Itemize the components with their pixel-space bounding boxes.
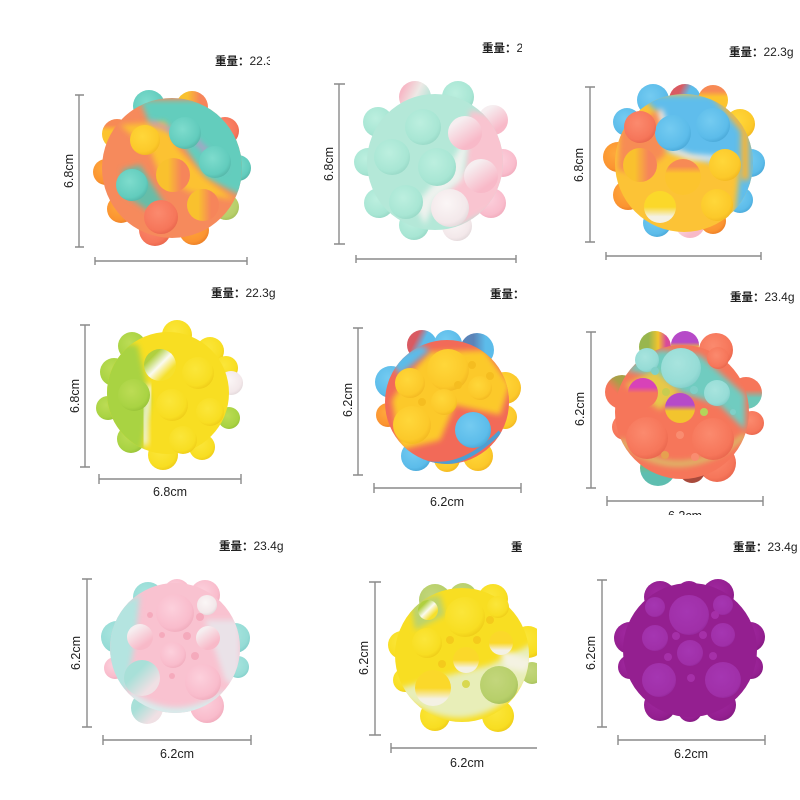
height dimension 4: 6.8cm bbox=[68, 379, 82, 413]
toy ball 4 bbox=[96, 320, 243, 470]
width dimension 6: 6.2cm bbox=[668, 509, 702, 523]
width dimension 7: 6.2cm bbox=[160, 747, 194, 761]
width dimension 3 bbox=[606, 252, 761, 260]
height dimension 5 bbox=[341, 328, 363, 475]
width dimension 9 bbox=[618, 735, 765, 761]
panel: product 4 yellow and green ball bbox=[68, 286, 276, 499]
weight label 1: 重量：22.3g bbox=[215, 54, 280, 68]
weight label 3: 重量：22.3g bbox=[729, 45, 794, 59]
toy ball 1 bbox=[93, 90, 251, 246]
panel: product 8 yellow and green ball bbox=[359, 541, 537, 767]
width dimension 7 bbox=[103, 735, 251, 761]
weight label 9: 重量：23.4g bbox=[733, 540, 798, 554]
width dimension 8 bbox=[391, 743, 537, 770]
width dimension 4 bbox=[99, 474, 241, 499]
width dimension 5: 6.2cm bbox=[430, 495, 464, 509]
weight label 8: 重量：23.4g bbox=[511, 540, 576, 554]
width dimension 6 bbox=[606, 496, 764, 515]
panel: product 3 blue and orange ball bbox=[572, 45, 794, 260]
panel: product 1 rainbow ball bbox=[62, 54, 280, 265]
height dimension 7: 6.2cm bbox=[69, 636, 83, 670]
toy ball 6 bbox=[605, 331, 764, 486]
height dimension 9: 6.2cm bbox=[584, 636, 598, 670]
toy ball 2 bbox=[354, 81, 517, 241]
height dimension 5: 6.2cm bbox=[341, 383, 355, 417]
width dimension 4: 6.8cm bbox=[153, 485, 187, 499]
width dimension 9: 6.2cm bbox=[674, 747, 708, 761]
height dimension 3: 6.8cm bbox=[572, 148, 586, 182]
weight label 7: 重量：23.4g bbox=[219, 539, 284, 553]
height dimension 6: 6.2cm bbox=[573, 392, 587, 426]
toy ball 5 bbox=[375, 330, 521, 472]
panel: product 6 coral and teal ball bbox=[573, 290, 795, 523]
weight label 5: 重量：23.4g bbox=[490, 287, 555, 301]
weight label 2: 重量：22.3g bbox=[482, 41, 547, 55]
width dimension 2 bbox=[356, 255, 516, 263]
toy ball 3 bbox=[603, 84, 765, 240]
height dimension 8: 6.2cm bbox=[357, 641, 371, 675]
height dimension 7 bbox=[69, 579, 92, 727]
toy ball 7 bbox=[101, 579, 250, 724]
height dimension 3 bbox=[572, 87, 595, 242]
width dimension 5 bbox=[374, 483, 521, 509]
height dimension 9 bbox=[584, 580, 607, 727]
height dimension 8 bbox=[357, 582, 381, 735]
height dimension 2: 6.8cm bbox=[322, 147, 336, 181]
toy ball 8 bbox=[388, 583, 544, 732]
panel: product 7 pink and aqua ball bbox=[69, 539, 284, 761]
width dimension 1 bbox=[95, 257, 247, 265]
weight label 6: 重量：23.4g bbox=[730, 290, 795, 304]
height dimension 1 bbox=[62, 95, 84, 247]
height dimension 1: 6.8cm bbox=[62, 154, 76, 188]
height dimension 4 bbox=[68, 325, 90, 467]
width dimension 8: 6.2cm bbox=[450, 756, 484, 770]
panel: product 2 mint and pink ball bbox=[324, 42, 522, 263]
panel: product 5 yellow, red and blue ball bbox=[343, 288, 522, 506]
height dimension 6 bbox=[573, 332, 596, 488]
height dimension 2 bbox=[322, 84, 345, 244]
toy ball 9 bbox=[614, 579, 765, 722]
weight label 4: 重量：22.3g bbox=[211, 286, 276, 300]
panel: product 9 purple ball bbox=[584, 540, 798, 761]
